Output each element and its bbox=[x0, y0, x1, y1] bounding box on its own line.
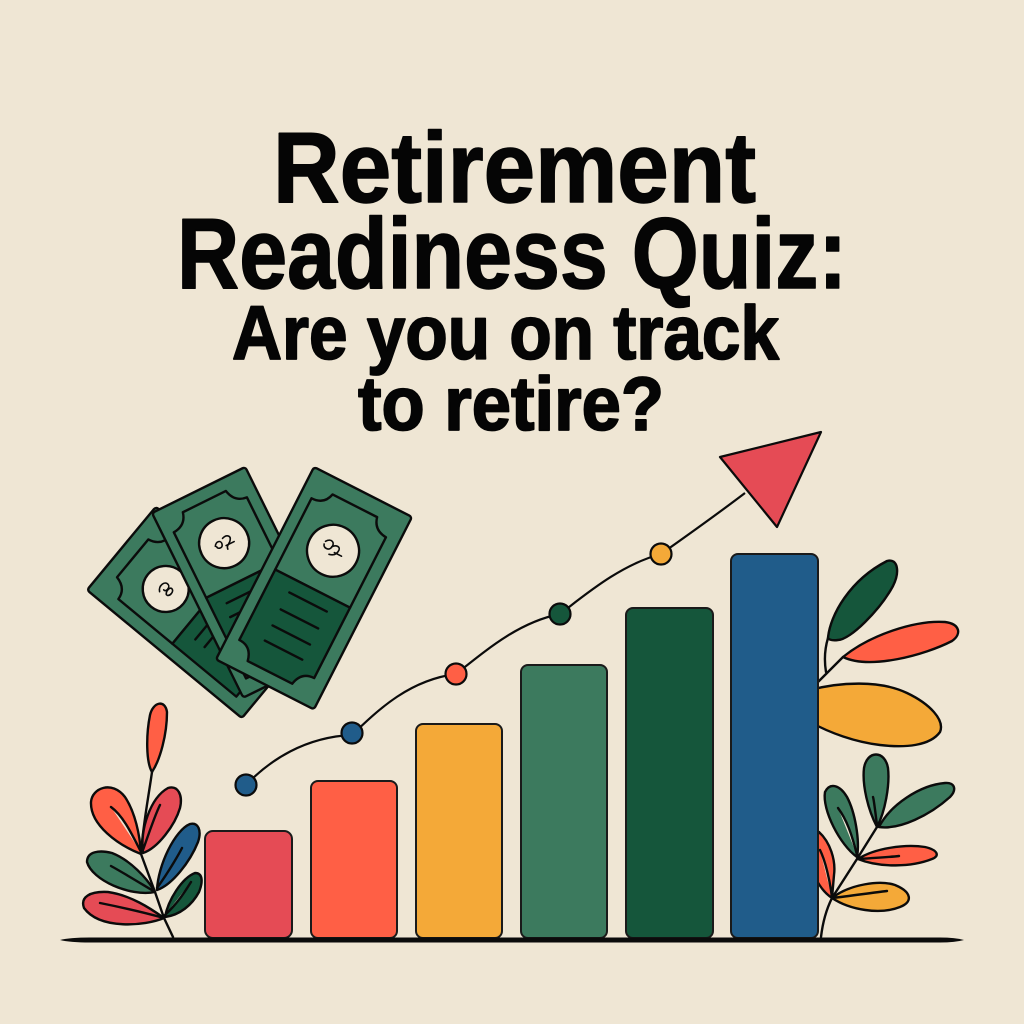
bar 4 bbox=[521, 665, 607, 938]
subtitle: to retire? bbox=[358, 362, 664, 447]
trend line bbox=[246, 493, 745, 785]
leaf: coral small bbox=[858, 846, 937, 865]
leaf: coral bbox=[843, 622, 958, 662]
title: Readiness Quiz: bbox=[177, 198, 847, 310]
bar 3 bbox=[416, 724, 502, 938]
title bbox=[177, 112, 847, 310]
icon: banknotes bbox=[87, 467, 412, 718]
leaf: coral behind bar bbox=[810, 832, 834, 898]
leaf: coral top bbox=[147, 704, 167, 772]
leaf: red bottom bbox=[83, 892, 164, 924]
leaf: red right bbox=[142, 787, 181, 853]
leaf: green left bbox=[87, 852, 155, 893]
bar 6 bbox=[731, 554, 818, 938]
subtitle bbox=[232, 291, 780, 447]
banknote: middle bbox=[152, 467, 337, 698]
banknote: front bbox=[216, 467, 412, 709]
plant: right bbox=[810, 561, 958, 937]
arrow head bbox=[720, 432, 821, 527]
point 2 bbox=[342, 722, 362, 744]
leaf: blue bbox=[157, 824, 200, 890]
bar chart bbox=[205, 554, 818, 938]
bar 5 bbox=[626, 608, 713, 938]
leaf: orange bbox=[810, 684, 941, 746]
leaf: green top bbox=[864, 754, 888, 827]
leaf: green left bbox=[825, 786, 858, 857]
leaf: dark green right bbox=[165, 873, 202, 917]
leaf: dark green bbox=[828, 561, 897, 640]
subtitle: Are you on track bbox=[232, 291, 780, 376]
point 5 bbox=[650, 544, 672, 564]
title: Retirement bbox=[273, 112, 756, 224]
baseline bbox=[60, 938, 964, 942]
leaf: coral left bbox=[91, 787, 141, 854]
banknote: back bbox=[87, 507, 311, 718]
bar 2 bbox=[311, 781, 397, 938]
leaf: green right bbox=[879, 783, 954, 827]
point 4 bbox=[550, 604, 570, 624]
point 1 bbox=[236, 774, 256, 796]
point 3 bbox=[446, 664, 466, 684]
plant: left bbox=[83, 704, 202, 937]
bar 1 bbox=[205, 831, 292, 938]
trend line points bbox=[236, 544, 672, 796]
leaf: orange small bbox=[832, 883, 909, 911]
